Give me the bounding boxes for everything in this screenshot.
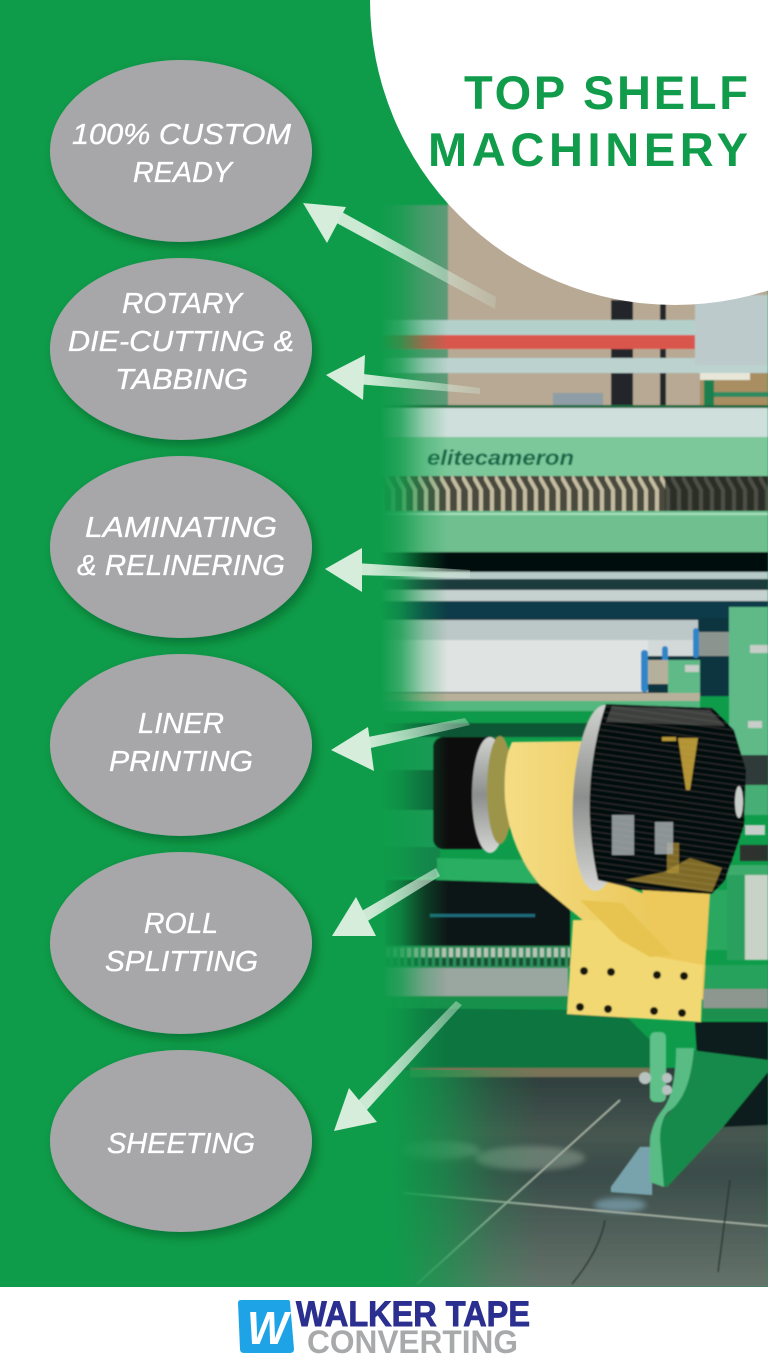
photo: large white roller xyxy=(380,620,698,692)
logo: blue badge xyxy=(238,1300,294,1353)
photo: fan silver ring xyxy=(568,704,632,892)
logo: W mark: W xyxy=(247,1302,291,1354)
photo: floor xyxy=(380,1068,768,1287)
arrow: roll splitting xyxy=(332,868,440,936)
photo: green leg xyxy=(650,1032,666,1102)
footer band xyxy=(0,1287,768,1365)
photo: distant green equipment xyxy=(700,372,768,405)
photo: wiring row xyxy=(380,476,768,511)
photo: light beam xyxy=(380,408,768,437)
title circle xyxy=(370,0,768,305)
photo: lower light rail xyxy=(380,358,768,373)
photo: dark wall posts xyxy=(611,300,666,405)
photo: floor light patches xyxy=(400,1141,646,1212)
photo: red rail xyxy=(380,335,695,349)
photo: mesh top highlight xyxy=(606,706,725,726)
photo: lower green panel xyxy=(380,511,768,552)
photo: mid rows xyxy=(380,693,700,877)
photo: bolts xyxy=(685,645,768,835)
photo: fan mesh cage xyxy=(590,704,746,894)
photo: grey floor block xyxy=(611,1147,652,1195)
photo: dark wiring end xyxy=(665,476,768,511)
photo: yellow mounting plate xyxy=(567,920,703,1022)
photo: black gap and rollers xyxy=(380,552,768,696)
photo: green side frames xyxy=(668,607,768,757)
oval: liner printing xyxy=(50,654,312,836)
oval: rotary die-cutting and tabbing: DIE-CUTTING & xyxy=(68,326,294,358)
photo: yellow showing through mesh xyxy=(625,737,722,892)
photo: green panel xyxy=(380,437,768,476)
photo: dark machine cavity xyxy=(385,880,570,946)
photo: right mid frame xyxy=(703,755,768,960)
green fade over photo lower xyxy=(376,1070,540,1287)
photo: beige strip at base xyxy=(410,1068,655,1077)
photo: floor cracks xyxy=(572,1180,730,1284)
arrow: laminating xyxy=(325,548,470,592)
photo: cavity highlight xyxy=(430,914,535,917)
oval: roll splitting xyxy=(50,852,312,1034)
photo: leg bolts xyxy=(639,1072,672,1095)
photo: brand wordmark on machine: elitecameron xyxy=(427,447,574,470)
oval: laminating and relinering xyxy=(50,456,312,638)
photo: floor seams xyxy=(404,1100,768,1284)
green fade over photo upper xyxy=(376,120,448,1070)
oval: roll splitting: ROLL xyxy=(144,908,218,940)
oval: liner printing: LINER xyxy=(138,708,224,740)
oval: rotary die-cutting and tabbing: TABBING xyxy=(115,364,248,396)
photo: panel highlight xyxy=(380,513,768,515)
photo: toothed rack xyxy=(385,946,570,968)
machine photo xyxy=(380,120,768,1287)
photo: white blades behind mesh xyxy=(612,815,673,855)
photo: grey bracket box xyxy=(695,295,768,365)
arrow: liner printing xyxy=(331,718,470,771)
photo: steel collar xyxy=(472,737,508,853)
photo: top light rail xyxy=(380,320,700,335)
logo: Walker Tape: WALKER TAPE xyxy=(296,1295,530,1334)
photo: dark panel at machine leg xyxy=(695,1022,768,1127)
photo: top beam xyxy=(380,405,768,408)
oval: 100% custom ready: 100% CUSTOM xyxy=(72,119,292,151)
photo: black hub xyxy=(433,737,501,849)
oval: rotary die-cutting and tabbing: ROTARY xyxy=(122,288,245,320)
photo: grey box on wall xyxy=(553,393,603,405)
oval: laminating and relinering: LAMINATING xyxy=(85,512,277,544)
title xyxy=(428,66,748,176)
photo: plate bolts xyxy=(576,967,688,1017)
logo xyxy=(238,1295,530,1360)
photo: green foot plate xyxy=(650,1050,768,1187)
arrow: rotary die-cutting xyxy=(326,355,480,400)
logo: Converting: CONVERTING xyxy=(307,1324,518,1360)
photo: green belt xyxy=(437,858,560,884)
photo: roller ends xyxy=(641,628,731,692)
title: TOP SHELF xyxy=(464,66,748,119)
photo: yellow rear post xyxy=(642,890,710,1000)
arrow: sheeting xyxy=(334,1001,462,1131)
photo: linear rail xyxy=(385,965,768,1020)
oval: liner printing: PRINTING xyxy=(109,746,253,778)
photo: yellow motor housing arm xyxy=(505,741,672,960)
photo: gusset xyxy=(580,900,672,957)
oval: sheeting: SHEETING xyxy=(107,1128,255,1160)
oval: roll splitting: SPLITTING xyxy=(105,946,258,978)
photo: factory wall xyxy=(448,120,768,405)
photo: wall door panel xyxy=(380,205,448,405)
oval: 100% custom ready xyxy=(50,60,312,242)
title: MACHINERY xyxy=(428,123,748,176)
photo: olive collar xyxy=(487,736,513,844)
oval: 100% custom ready: READY xyxy=(133,157,235,189)
photo: light green foot face xyxy=(650,1048,694,1187)
oval: sheeting xyxy=(50,1050,312,1232)
arrow: custom ready xyxy=(303,203,496,309)
oval: rotary die-cutting and tabbing xyxy=(50,258,312,440)
photo: fan hub cap xyxy=(735,786,743,818)
oval: laminating and relinering: & RELINERING xyxy=(77,550,285,582)
photo: lower green housing xyxy=(385,1008,650,1075)
